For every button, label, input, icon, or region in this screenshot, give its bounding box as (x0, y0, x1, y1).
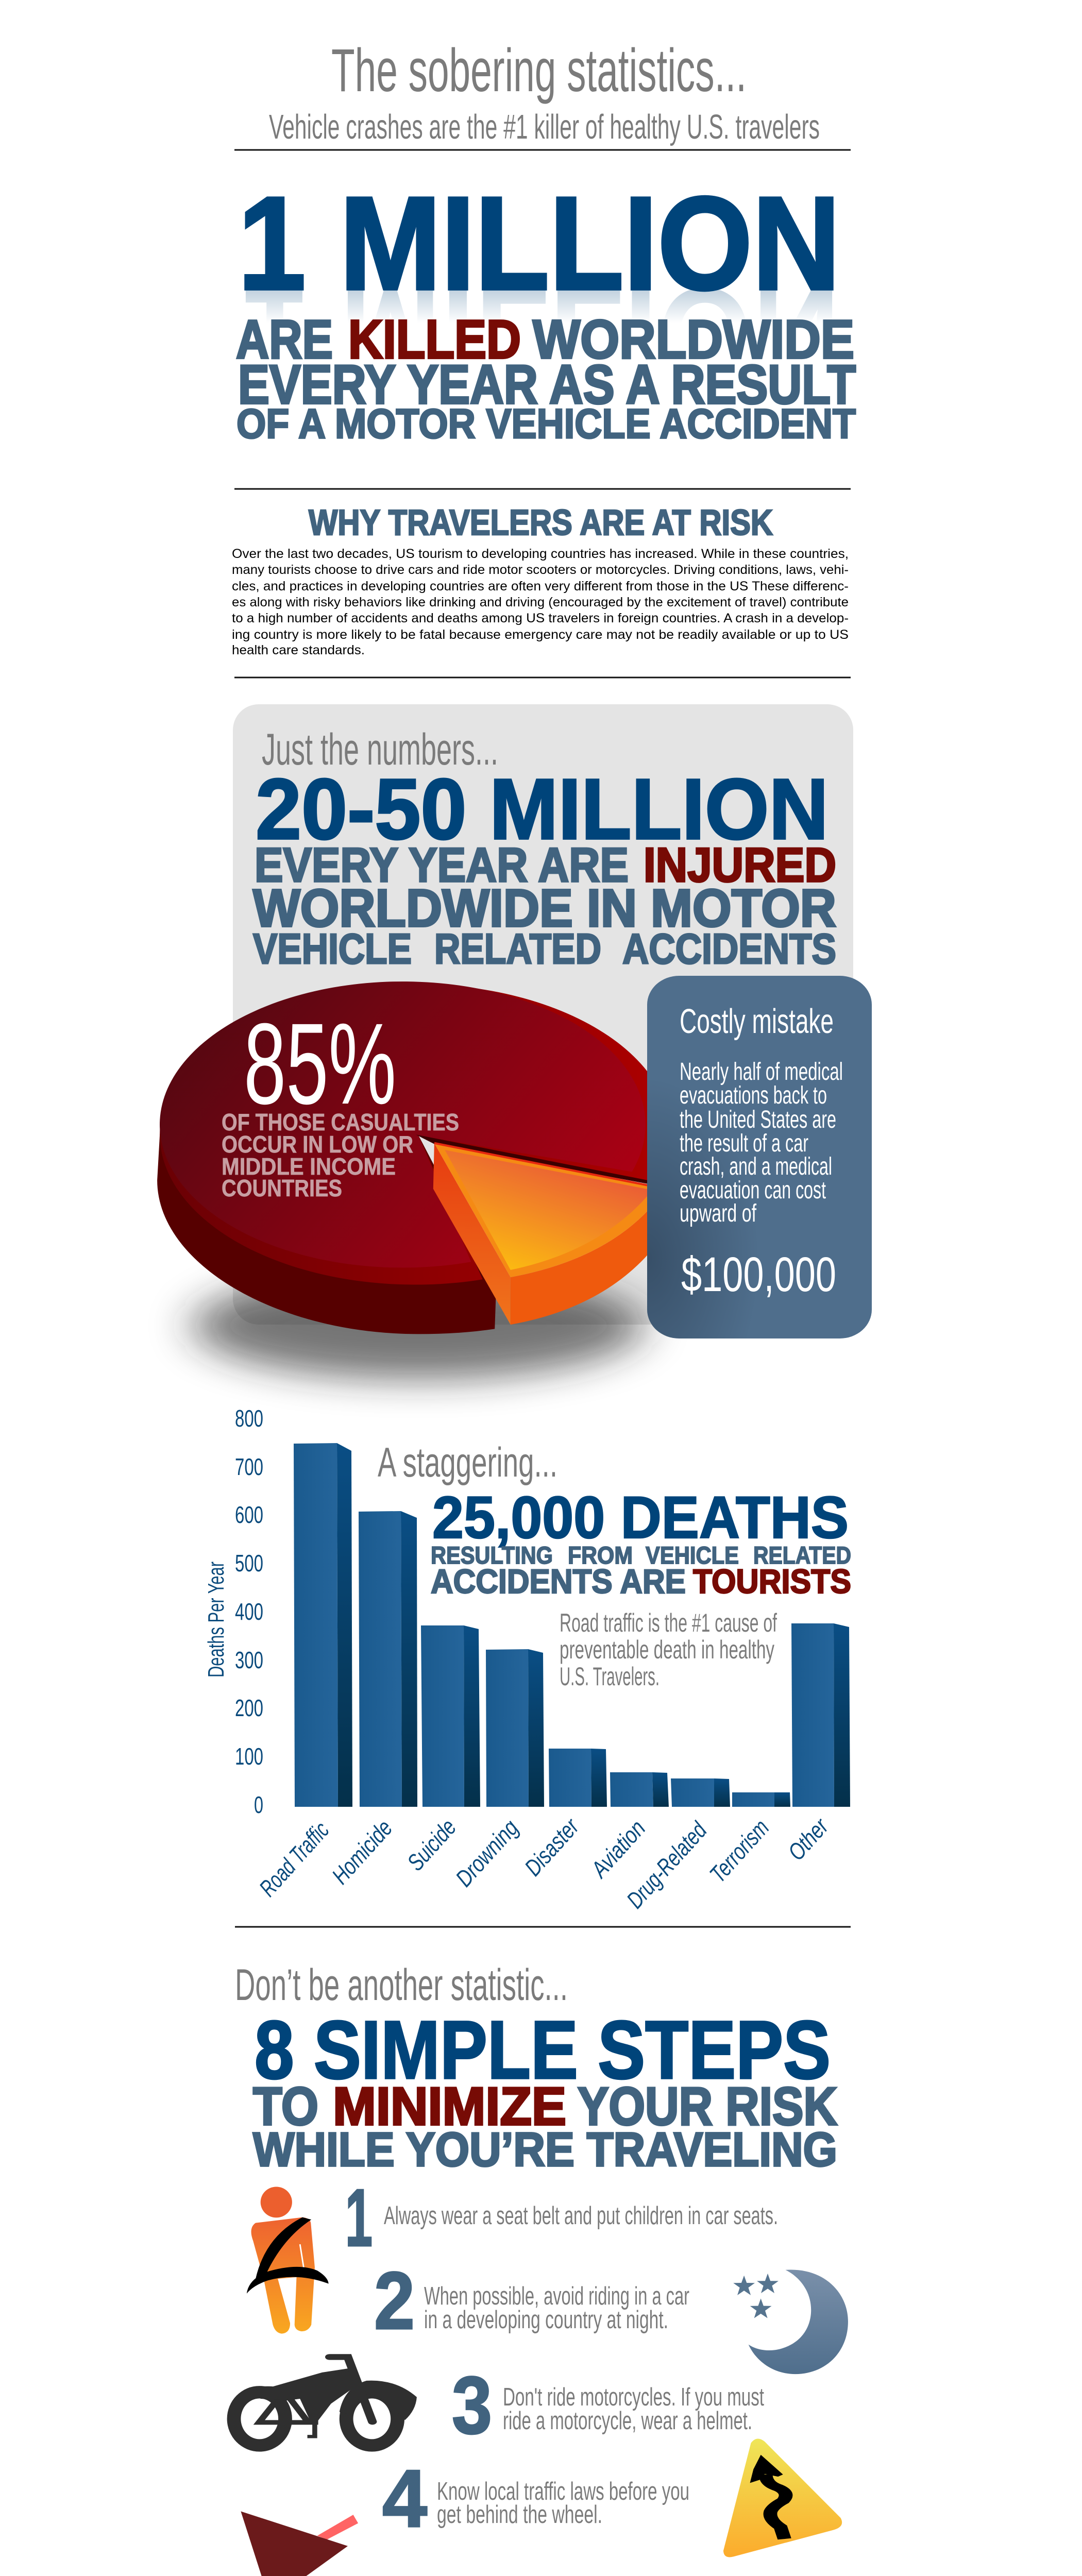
x axis labels: Disaster (519, 1812, 584, 1881)
subheading: are killed worldwide: EVERY YEAR AS A RESULT (238, 353, 856, 415)
section label: don't be another statistic: Don’t be another statistic... (235, 1960, 568, 2010)
subheading: are killed worldwide: KILLED (348, 309, 521, 370)
pie caption: MIDDLE INCOME (222, 1153, 396, 1180)
step 5: don't drink and drive (236, 2511, 800, 2576)
bar: homicide (359, 1511, 417, 1807)
pie cut edge (416, 1134, 663, 1187)
x axis labels: Drug-Related (621, 1817, 712, 1913)
icon: motorcycle (227, 2357, 417, 2452)
bar: suicide (421, 1625, 480, 1807)
reflection of the headline: 1 MILLION (238, 261, 840, 409)
pie top surface (160, 981, 646, 1268)
number 1: 1 (345, 2173, 373, 2263)
pie back wall (655, 1136, 672, 1234)
subheading: accidents are tourists: RESULTING (431, 1541, 553, 1569)
y axis labels: 700 (235, 1453, 263, 1480)
subheading: every year are injured: ACCIDENTS (622, 925, 836, 973)
wedge outer wall (511, 1189, 666, 1325)
step text 4: get behind the wheel. (437, 2501, 602, 2529)
pie side wall (157, 1134, 496, 1334)
note: road traffic cause of death: preventable death in healthy (560, 1635, 774, 1664)
step text 3 (503, 2383, 764, 2435)
body text: why travelers are at risk: ing country is more likely to be fatal because emergency care may not be readily available or up to US (232, 628, 849, 642)
subheading: to minimize your risk (253, 2077, 837, 2176)
step text 4: Know local traffic laws before you (437, 2478, 689, 2505)
pie caption: COUNTRIES (222, 1175, 342, 1201)
step text 2 (424, 2282, 689, 2334)
step 3: motorcycles (227, 2357, 764, 2452)
number 3: 3 (452, 2360, 492, 2451)
y axis labels: 200 (235, 1694, 263, 1721)
subheading: are killed worldwide (236, 309, 856, 447)
callout box: costly mistake (647, 976, 872, 1338)
pie chart: 85 percent (157, 981, 672, 1379)
body text: why travelers are at risk: Over the last two decades, US tourism to developing countries has increased. While in these countries, (232, 547, 849, 561)
callout text: upward of (680, 1200, 756, 1227)
bar chart: deaths per year (204, 1405, 850, 1913)
body text: why travelers are at risk (232, 547, 849, 657)
subheading: are killed worldwide: ARE (236, 309, 333, 370)
callout text: evacuation can cost (680, 1177, 826, 1204)
callout text: Nearly half of medical (680, 1058, 843, 1086)
y axis labels: 500 (235, 1550, 263, 1577)
section label: just the numbers: Just the numbers... (262, 725, 498, 774)
x axis labels: Aviation (585, 1815, 650, 1883)
pie caption: OF THOSE CASUALTIES (222, 1109, 459, 1136)
bar: drug-related (671, 1778, 730, 1807)
bar: aviation (610, 1772, 669, 1807)
body text: why travelers are at risk: cles, and practices in developing countries are often very different from those in the US These differenc- (232, 579, 849, 594)
bar: other (791, 1623, 850, 1807)
headline: 8 simple steps: 8 SIMPLE STEPS (255, 2004, 831, 2096)
subheading: to minimize your risk: YOUR RISK (578, 2077, 837, 2137)
callout text (680, 1058, 843, 1227)
subheading: accidents are tourists (431, 1541, 851, 1600)
x axis labels: Terrorism (704, 1814, 774, 1888)
step 2: night (374, 2256, 848, 2374)
x axis labels: Other (783, 1812, 834, 1866)
body text: why travelers are at risk: health care standards. (232, 643, 365, 657)
y axis labels: 400 (235, 1598, 263, 1625)
subheading: to minimize your risk: WHILE YOU’RE TRAVELING (253, 2123, 837, 2176)
subheading: every year are injured: VEHICLE (253, 925, 412, 973)
y axis labels: 0 (254, 1791, 263, 1818)
y axis labels (235, 1405, 263, 1818)
step text 3: ride a motorcycle, wear a helmet. (503, 2407, 752, 2435)
icon: moon and stars (733, 2270, 848, 2374)
pie caption (222, 1109, 459, 1201)
subheading: accidents are tourists: TOURISTS (693, 1562, 851, 1600)
subheading: every year are injured: RELATED (434, 925, 601, 973)
subheading: accidents are tourists: VEHICLE (646, 1541, 739, 1569)
subheading: every year are injured (253, 838, 836, 973)
number 2: 2 (374, 2256, 415, 2346)
subheading: every year are injured: EVERY YEAR ARE (255, 838, 629, 892)
number 4: 4 (382, 2453, 427, 2544)
body text: why travelers are at risk: many tourists choose to drive cars and ride motor scooters or motorcycles. Driving conditions, laws, vehi- (232, 563, 849, 577)
title: the sobering statistics: The sobering statistics... (331, 37, 747, 105)
x axis labels (254, 1812, 834, 1913)
note: road traffic cause of death (560, 1608, 777, 1691)
heading: why travelers are at risk: WHY TRAVELERS ARE AT RISK (309, 502, 773, 543)
y axis labels: 100 (235, 1743, 263, 1770)
subheading: are killed worldwide: WORLDWIDE (533, 309, 854, 370)
headline: 25,000 deaths: 25,000 DEATHS (432, 1485, 849, 1551)
step text 3: Don't ride motorcycles. If you must (503, 2383, 764, 2411)
subheading: to minimize your risk: TO (253, 2077, 318, 2137)
callout text: evacuations back to (680, 1082, 827, 1109)
x axis labels: Drowning (450, 1814, 523, 1892)
panel: just the numbers (233, 704, 853, 1325)
y axis title: Deaths Per Year (204, 1562, 229, 1677)
y axis labels: 800 (235, 1405, 263, 1432)
headline: 20-50 million: 20-50 MILLION (256, 761, 829, 857)
pie shadow (192, 1272, 645, 1379)
step text 1: Always wear a seat belt and put children in car seats. (384, 2202, 778, 2230)
bar: road traffic (294, 1443, 352, 1807)
x axis labels: Suicide (402, 1814, 461, 1876)
y axis labels: 600 (235, 1501, 263, 1528)
callout text: the result of a car (680, 1130, 808, 1157)
callout heading: Costly mistake (680, 1002, 834, 1041)
bar: disaster (549, 1749, 607, 1807)
step text 2: When possible, avoid riding in a car (424, 2282, 689, 2310)
subheading: are killed worldwide: OF A MOTOR VEHICLE ACCIDENT (236, 401, 856, 447)
callout text: crash, and a medical (680, 1153, 832, 1180)
body text: why travelers are at risk: es along with risky behaviors like drinking and driving (encouraged by the excitement of travel) contribute (232, 595, 849, 609)
subheading: every year are injured: WORLDWIDE IN MOTOR (253, 878, 836, 938)
wedge top (434, 1143, 666, 1277)
icon: winding road sign (723, 2438, 842, 2557)
subheading: accidents are tourists: FROM (568, 1541, 633, 1569)
icon: person with seat belt (247, 2187, 329, 2334)
section label: a staggering: A staggering... (378, 1439, 557, 1486)
bar: terrorism (732, 1792, 790, 1807)
step 4: traffic laws (382, 2438, 842, 2557)
subheading: accidents are tourists: ACCIDENTS ARE (431, 1562, 686, 1600)
step text 4 (437, 2478, 689, 2529)
callout text: the United States are (680, 1106, 836, 1133)
step 1: seat belt (247, 2173, 778, 2334)
subheading: to minimize your risk: MINIMIZE (333, 2077, 566, 2137)
x axis labels: Road Traffic (254, 1817, 334, 1902)
callout value: $100,000 (681, 1247, 836, 1302)
subheading: every year are injured: INJURED (644, 838, 836, 892)
pie rim (160, 984, 671, 1285)
note: road traffic cause of death: U.S. Travelers. (560, 1662, 660, 1691)
headline: 1 million: 1 MILLION (238, 170, 840, 317)
icon: martini glass (236, 2511, 358, 2576)
pie caption: OCCUR IN LOW OR (222, 1131, 413, 1158)
step text 2: in a developing country at night. (424, 2306, 668, 2334)
bar: drowning (486, 1649, 544, 1807)
body text: why travelers are at risk: to a high number of accidents and deaths among US travelers in foreign countries. A crash in a develop- (232, 611, 849, 625)
wedge left wall (433, 1143, 511, 1325)
pie value: 85 percent: 85% (244, 999, 396, 1128)
note: road traffic cause of death: Road traffic is the #1 cause of (560, 1608, 777, 1637)
subheading: accidents are tourists: RELATED (753, 1541, 851, 1569)
x axis labels: Homicide (327, 1815, 397, 1889)
y axis labels: 300 (235, 1647, 263, 1673)
